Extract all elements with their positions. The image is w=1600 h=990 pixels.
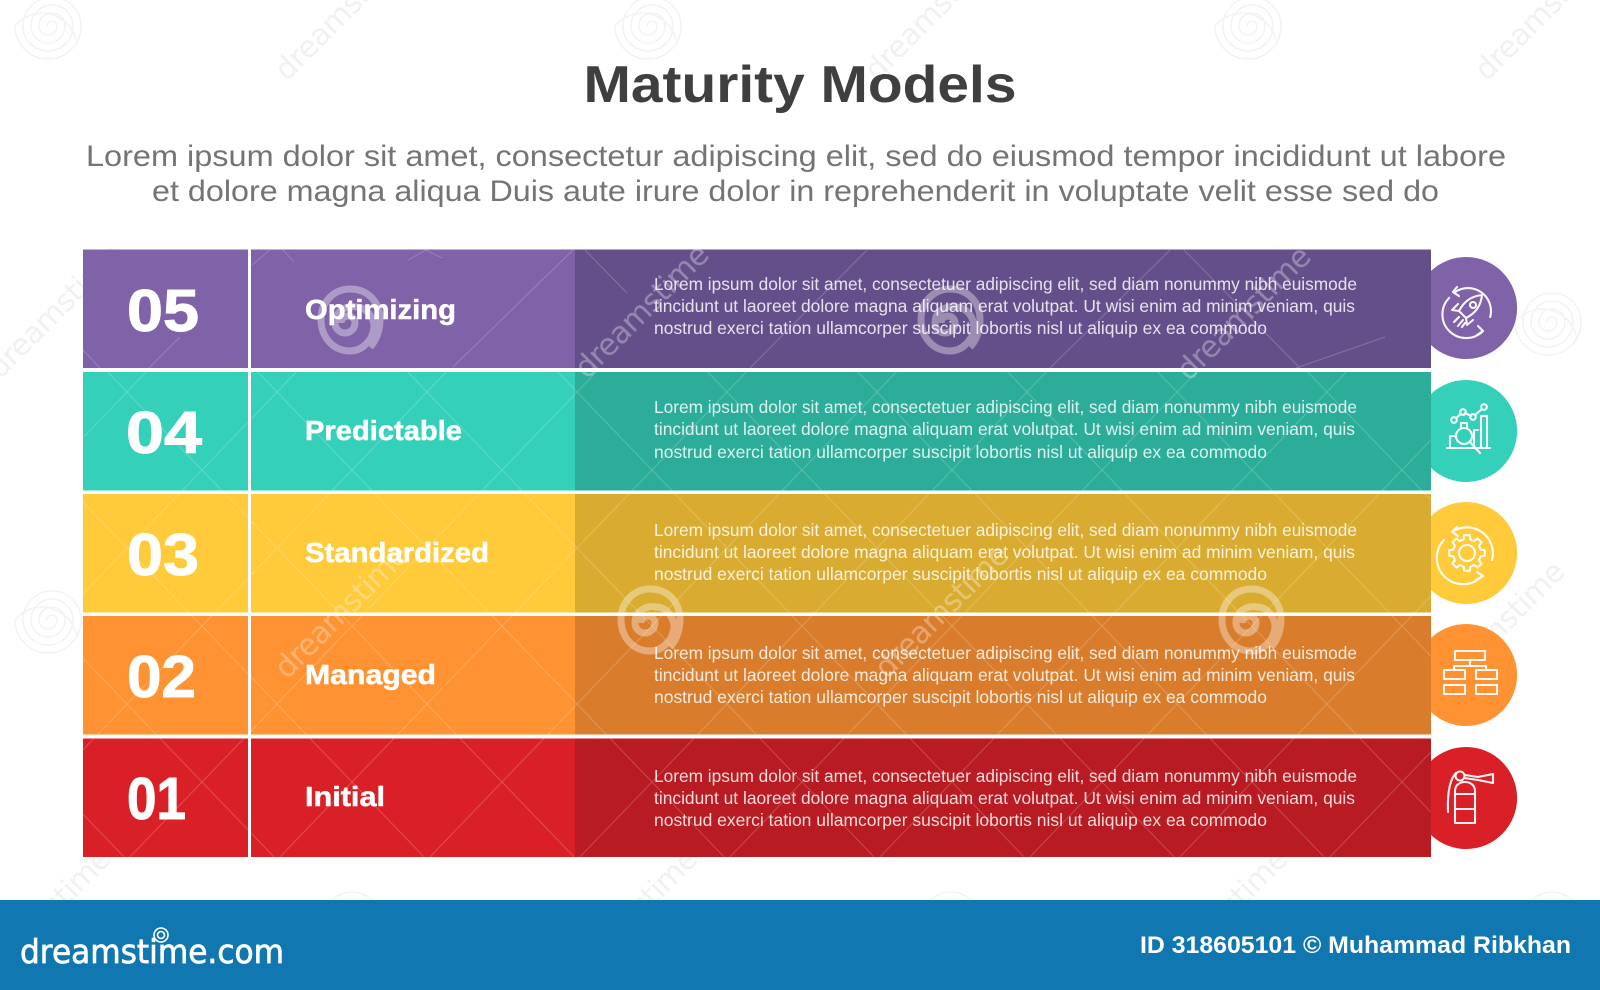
row 05 Optimizing bbox=[83, 250, 1517, 368]
row 05 Optimizing: Optimizing bbox=[305, 294, 456, 325]
row 05 Optimizing: 05 bbox=[127, 278, 199, 344]
text: dreamstime bbox=[1424, 554, 1572, 703]
row 01 Initial: nostrud exerci tation ullamcorper suscipit lobortis nisl ut aliquip ex ea commodo bbox=[654, 810, 1267, 830]
row 03 Standardized: 03 bbox=[127, 522, 199, 588]
row 03 Standardized: Standardized bbox=[305, 537, 489, 568]
row 04 Predictable bbox=[83, 372, 1517, 490]
row 04 Predictable: Predictable bbox=[305, 415, 462, 446]
row 03 Standardized bbox=[83, 494, 1517, 612]
row 02 Managed bbox=[83, 616, 1517, 734]
text: dreamstime bbox=[268, 537, 416, 686]
row 04 Predictable: tincidunt ut laoreet dolore magna aliquam erat volutpat. Ut wisi enim ad minim veniam, quis bbox=[654, 419, 1355, 439]
footer bar bbox=[0, 900, 1600, 990]
row 01 Initial: 01 bbox=[127, 766, 186, 832]
row 01 Initial bbox=[83, 738, 1517, 857]
title: Maturity Models bbox=[584, 56, 1016, 114]
text: dreamstime bbox=[868, 537, 1016, 686]
row 04 Predictable: Lorem ipsum dolor sit amet, consectetuer adipiscing elit, sed diam nonummy nibh euismode bbox=[654, 397, 1357, 417]
row 02 Managed: Managed bbox=[305, 659, 436, 690]
footer credit: ID 318605101 © Muhammad Ribkhan bbox=[1140, 932, 1571, 959]
text: dreamstime bbox=[1170, 239, 1318, 388]
row 01 Initial: tincidunt ut laoreet dolore magna aliquam erat volutpat. Ut wisi enim ad minim veniam, quis bbox=[654, 788, 1355, 808]
row 01 Initial: Lorem ipsum dolor sit amet, consectetuer adipiscing elit, sed diam nonummy nibh euismode bbox=[654, 766, 1357, 786]
icon: hierarchy blocks bbox=[1444, 651, 1497, 694]
row 05 Optimizing: Lorem ipsum dolor sit amet, consectetuer adipiscing elit, sed diam nonummy nibh euismode bbox=[654, 274, 1357, 294]
text: dreamstime bbox=[568, 237, 716, 386]
text: dreamstime bbox=[557, 841, 705, 990]
subtitle bbox=[86, 140, 1506, 208]
row 04 Predictable: nostrud exerci tation ullamcorper suscipit lobortis nisl ut aliquip ex ea commodo bbox=[654, 442, 1267, 462]
icon: fire extinguisher bbox=[1448, 772, 1493, 823]
row 02 Managed: tincidunt ut laoreet dolore magna aliquam erat volutpat. Ut wisi enim ad minim veniam, quis bbox=[654, 665, 1355, 685]
row 01 Initial: Initial bbox=[305, 781, 385, 812]
row 03 Standardized: Lorem ipsum dolor sit amet, consectetuer adipiscing elit, sed diam nonummy nibh euismode bbox=[654, 520, 1357, 540]
text: dreamstime bbox=[1147, 841, 1295, 990]
icon: chart with magnifier bbox=[1447, 404, 1490, 453]
row 05 Optimizing: nostrud exerci tation ullamcorper suscipit lobortis nisl ut aliquip ex ea commodo bbox=[654, 318, 1267, 338]
icon: rocket bbox=[1442, 287, 1491, 338]
row 02 Managed: Lorem ipsum dolor sit amet, consectetuer adipiscing elit, sed diam nonummy nibh euismode bbox=[654, 643, 1357, 663]
footer logo: dreamstime.com: dreamstime.com bbox=[20, 932, 284, 971]
row 03 Standardized: nostrud exerci tation ullamcorper suscipit lobortis nisl ut aliquip ex ea commodo bbox=[654, 564, 1267, 584]
subtitle: Lorem ipsum dolor sit amet, consectetur adipiscing elit, sed do eiusmod tempor incididunt ut labore bbox=[86, 140, 1506, 173]
icon: gear with arrows bbox=[1437, 527, 1493, 584]
row 04 Predictable: 04 bbox=[126, 400, 202, 466]
row 02 Managed: nostrud exerci tation ullamcorper suscipit lobortis nisl ut aliquip ex ea commodo bbox=[654, 687, 1267, 707]
row 02 Managed: 02 bbox=[127, 644, 196, 710]
row 05 Optimizing: tincidunt ut laoreet dolore magna aliquam erat volutpat. Ut wisi enim ad minim veniam, quis bbox=[654, 296, 1355, 316]
row 03 Standardized: tincidunt ut laoreet dolore magna aliquam erat volutpat. Ut wisi enim ad minim veniam, quis bbox=[654, 542, 1355, 562]
subtitle: et dolore magna aliqua Duis aute irure dolor in reprehenderit in voluptate velit esse sed do bbox=[152, 175, 1439, 208]
